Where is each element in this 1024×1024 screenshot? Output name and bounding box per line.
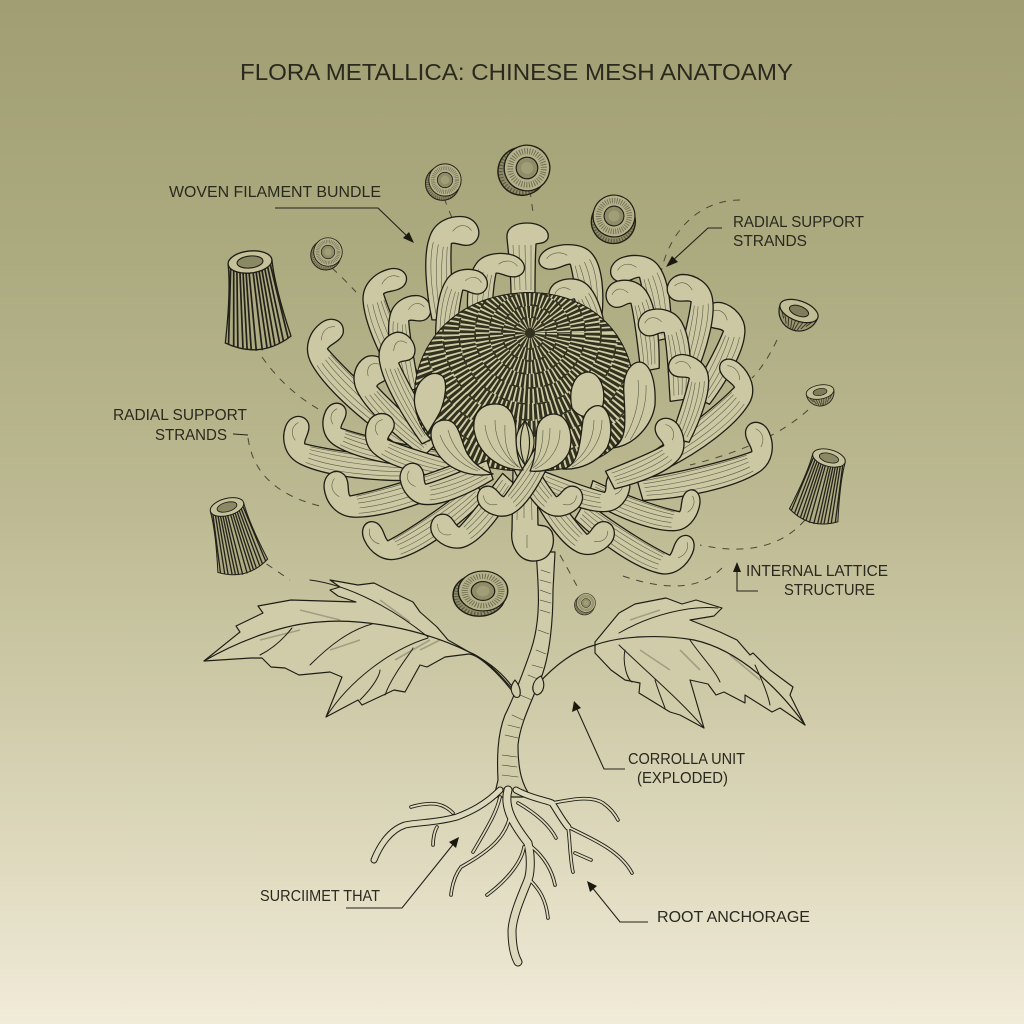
- label: root anchorage: ROOT ANCHORAGE: [657, 909, 810, 926]
- label: surciimet that: SURCIIMET THAT: [260, 888, 380, 905]
- dashed connector lines: [248, 190, 808, 592]
- label: radial support strands, right: STRANDS: [733, 233, 807, 250]
- stem: [494, 552, 555, 797]
- label: radial support strands, right: [666, 214, 865, 267]
- front cupped petals: [414, 362, 655, 475]
- lower short petals: [396, 413, 694, 566]
- label: root anchorage: [587, 881, 810, 926]
- exploded parts: fringed cylinders: [200, 248, 855, 581]
- right leaf: [533, 598, 805, 728]
- label: radial support strands, left: [113, 407, 248, 444]
- central dome of woven filaments: [414, 292, 631, 472]
- label: woven filament bundle: [169, 184, 414, 243]
- label: surciimet that: [260, 837, 459, 908]
- label: corolla unit exploded: CORROLLA UNIT: [628, 751, 745, 768]
- exploded parts: discs and cups: [311, 137, 836, 616]
- label: woven filament bundle: WOVEN FILAMENT BUNDLE: [169, 184, 381, 201]
- label: radial support strands, left: RADIAL SUPPORT: [113, 407, 248, 424]
- left leaf: [204, 580, 520, 717]
- title: FLORA METALLICA: CHINESE MESH ANATOAMY: [240, 59, 793, 85]
- label: internal lattice structure: [733, 562, 888, 599]
- label: radial support strands, right: RADIAL SUPPORT: [733, 214, 865, 231]
- label: internal lattice structure: STRUCTURE: [784, 582, 875, 599]
- flower head: [278, 200, 781, 586]
- label: radial support strands, left: STRANDS: [155, 427, 227, 444]
- roots: [374, 790, 632, 962]
- label: corolla unit exploded: (EXPLODED): [637, 770, 728, 787]
- label: internal lattice structure: INTERNAL LATTICE: [746, 563, 888, 580]
- label: corolla unit exploded: [572, 701, 745, 787]
- back and outer petals: [278, 216, 781, 586]
